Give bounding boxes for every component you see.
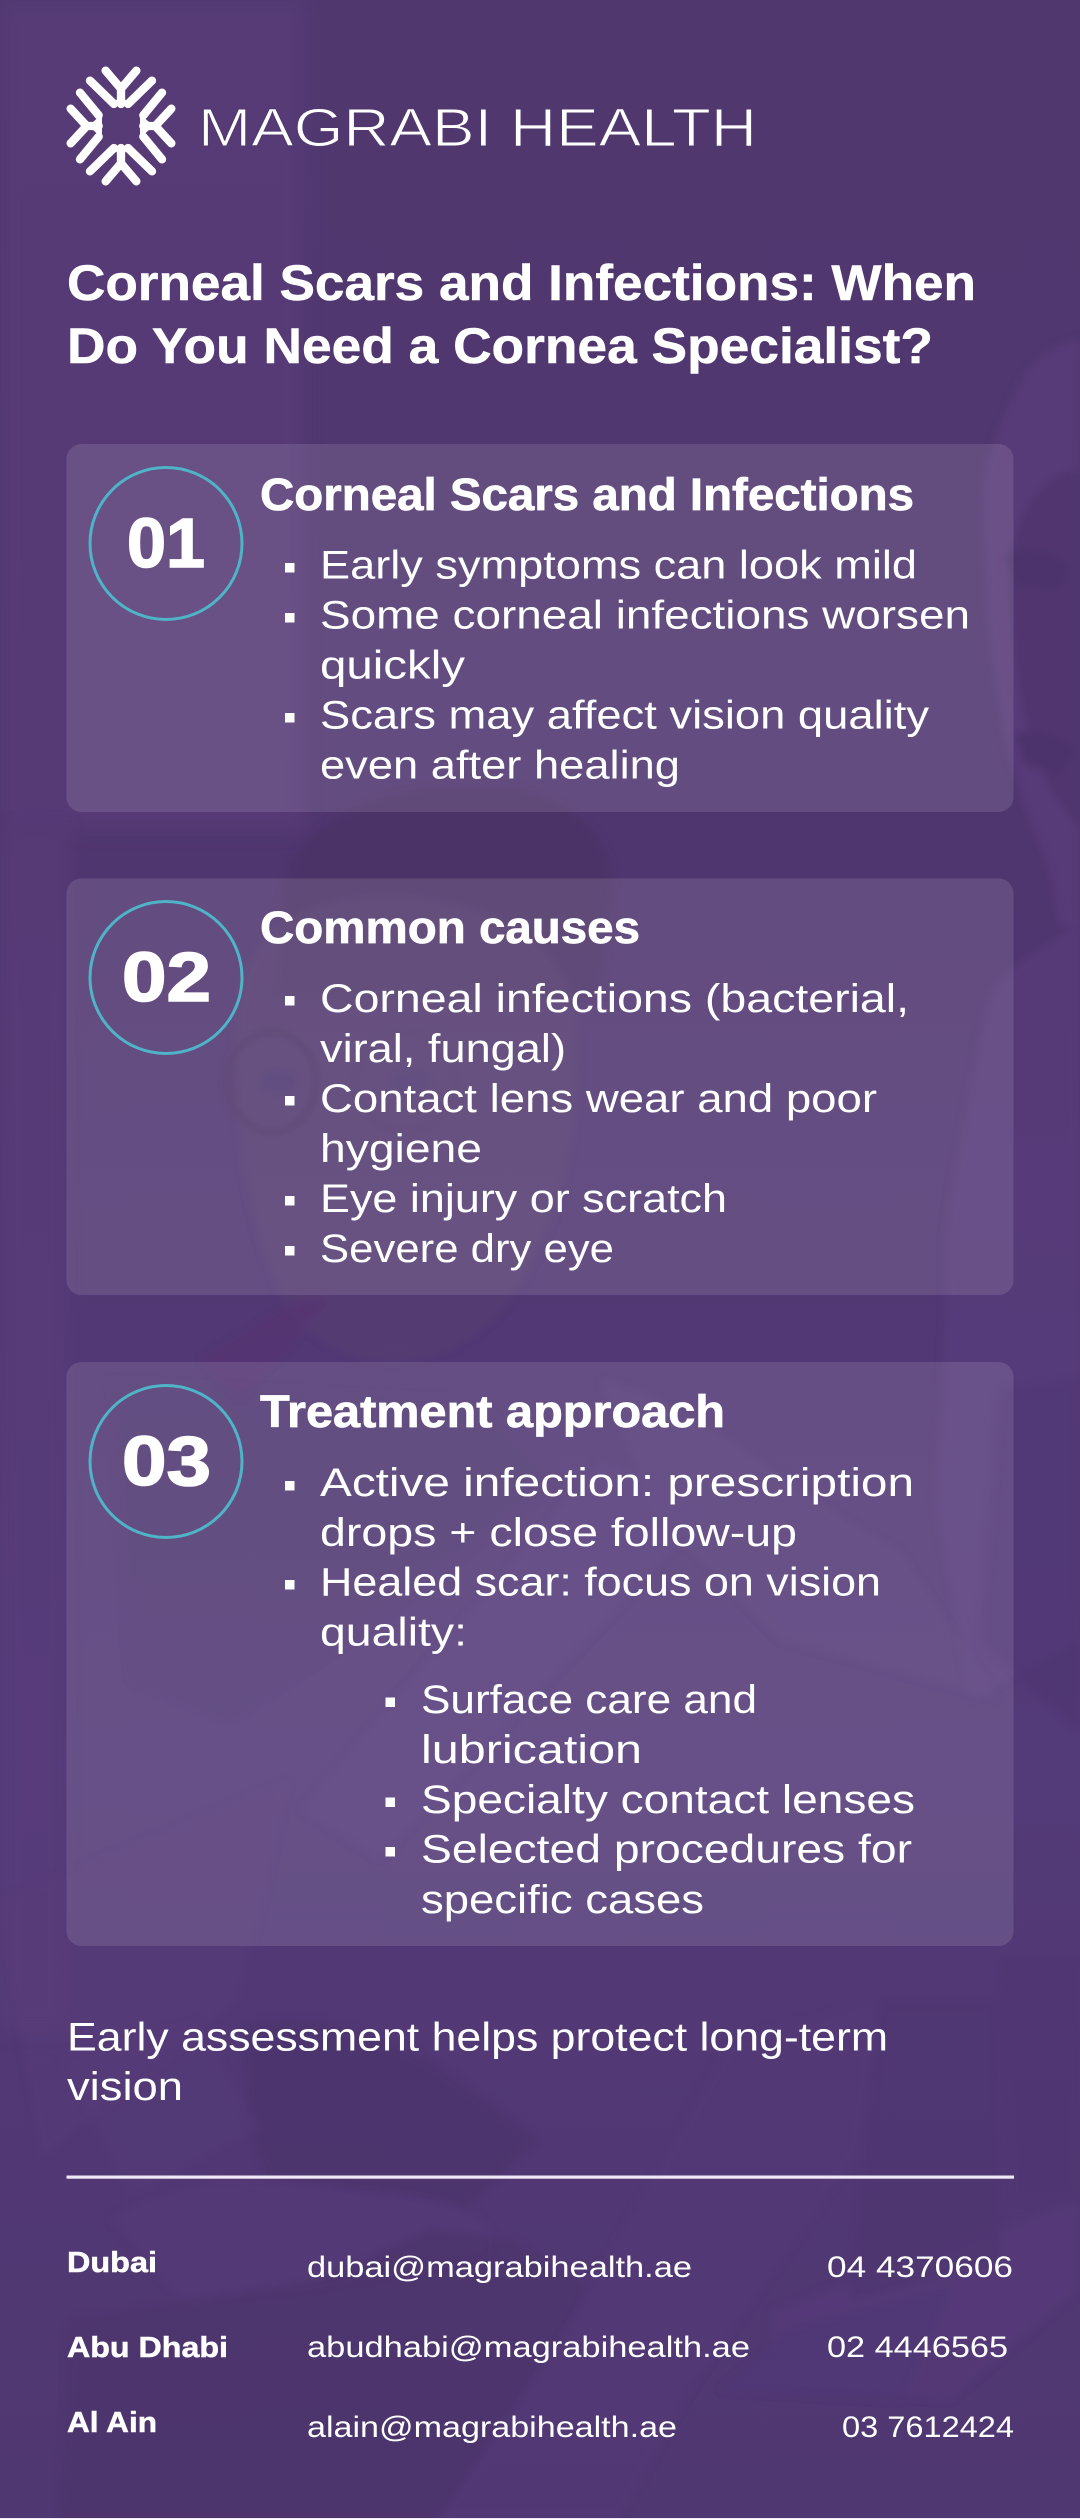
contact row: Al Ain: alain@magrabihealth.ae [307, 2411, 677, 2444]
closing statement [67, 2016, 888, 2109]
nested bullet list: lubrication [421, 1728, 642, 1772]
bullet list [285, 977, 909, 1271]
panel: common causes [66, 878, 1014, 1295]
nested bullet list: specific cases [421, 1878, 704, 1922]
title: Do You Need a Cornea Specialist? [67, 318, 933, 374]
wordmark: MAGRABI HEALTH [198, 98, 757, 158]
bullet list: quality: [320, 1610, 467, 1654]
closing statement: Early assessment helps protect long-term [67, 2016, 888, 2060]
bullet list: Eye injury or scratch [320, 1177, 727, 1221]
nested bullet list: Surface care and [421, 1678, 757, 1722]
bullet list: viral, fungal) [320, 1027, 566, 1071]
number badge 01 [90, 468, 242, 620]
contact row: Al Ain: Al Ain [67, 2407, 157, 2439]
bullet list: Scars may affect vision quality [320, 694, 929, 738]
bullet list: Severe dry eye [320, 1227, 614, 1271]
contact row: Abu Dhabi: abudhabi@magrabihealth.ae [307, 2331, 750, 2364]
bullet list [285, 544, 970, 788]
bullet list: Contact lens wear and poor [320, 1077, 877, 1121]
heading: Treatment approach [260, 1386, 725, 1437]
bullet list: drops + close follow-up [320, 1511, 797, 1555]
heading: Corneal Scars and Infections [260, 469, 914, 520]
bullet list: Healed scar: focus on vision [320, 1560, 881, 1604]
logo [71, 71, 757, 181]
number badge 02 [90, 902, 242, 1054]
title: Corneal Scars and Infections: When [67, 255, 976, 311]
title [67, 255, 976, 374]
panel: corneal scars and infections [66, 444, 1014, 812]
bullet list: quickly [320, 644, 465, 688]
contact row: Abu Dhabi: Abu Dhabi [67, 2332, 228, 2364]
number badge 03 [90, 1386, 242, 1538]
number badge 01: 01 [127, 504, 205, 582]
bullet list [285, 1461, 914, 1654]
panel: treatment approach [66, 1362, 1014, 1946]
nested bullet list: Specialty contact lenses [421, 1778, 915, 1822]
icon: Magrabi snowflake mark [71, 71, 171, 181]
nested bullet list: Selected procedures for [421, 1828, 912, 1872]
contact row: Dubai [67, 2247, 1013, 2284]
contact row: Dubai: Dubai [67, 2247, 157, 2279]
bullet list: even after healing [320, 744, 680, 788]
heading: Common causes [260, 902, 640, 953]
number badge 03: 03 [122, 1422, 211, 1500]
contact row: Dubai: 04 4370606 [827, 2251, 1013, 2284]
nested bullet list [386, 1678, 915, 1922]
contact row: Abu Dhabi: 02 4446565 [827, 2331, 1008, 2364]
bullet list: hygiene [320, 1127, 482, 1171]
bullet list: Some corneal infections worsen [320, 594, 970, 638]
number badge 02: 02 [122, 938, 211, 1016]
bullet list: Corneal infections (bacterial, [320, 977, 909, 1021]
contact table [67, 2247, 1014, 2444]
bullet list: Early symptoms can look mild [320, 544, 917, 588]
closing statement: vision [67, 2065, 183, 2109]
contact row: Dubai: dubai@magrabihealth.ae [307, 2251, 692, 2284]
contact row: Al Ain [67, 2407, 1014, 2444]
bullet list: Active infection: prescription [320, 1461, 914, 1505]
contact row: Al Ain: 03 7612424 [842, 2411, 1014, 2444]
contact row: Abu Dhabi [67, 2331, 1008, 2364]
